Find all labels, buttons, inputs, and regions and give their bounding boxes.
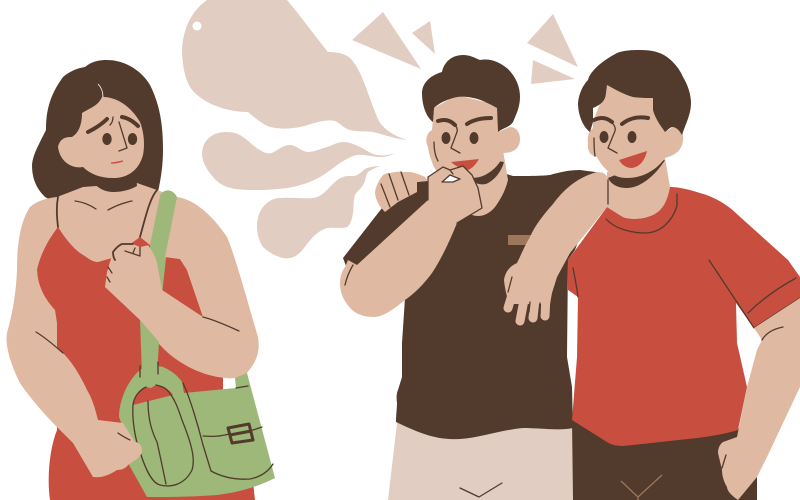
nose and cheek lines [434,122,460,161]
bag body and loop [119,366,275,497]
upper bag strap [150,190,177,295]
woman hair [32,60,163,205]
head [588,85,683,178]
red dress tip above fist [133,237,149,247]
trouser crease [460,483,502,497]
neck and chest [460,150,508,216]
shirt pocket tag [508,235,532,245]
woman figure [7,60,275,500]
nose and cheek lines [594,121,617,156]
woman eyes [102,133,112,145]
bag buckle [228,424,253,443]
lower bag strap [140,320,159,375]
pale trousers [388,423,573,500]
man in red shirt [375,50,800,500]
smile [619,151,647,168]
eyes [600,131,608,143]
sleeve seam and hem [573,260,800,328]
arm outline [345,166,482,285]
red t-shirt [568,187,800,446]
eyebrows [594,117,648,124]
whistling arm [340,166,482,317]
finger lines [508,180,608,314]
neck shadow [608,160,665,188]
fist lines [113,244,133,260]
woman raised arm and fist [105,197,259,378]
gossip speech clouds [182,0,578,258]
dress straps [57,190,157,237]
trouser seam [621,475,662,500]
dress [37,227,255,500]
mouth [451,159,479,170]
knuckle lines [381,172,409,207]
head [426,95,520,178]
dark trousers [572,420,757,500]
woman arm lines [36,317,239,440]
eyes [442,132,450,144]
man in dark shirt [340,55,603,500]
whistling fingers [442,175,460,182]
cloud highlight dot [192,22,202,30]
red dress seen through loop [133,385,173,405]
woman face [58,96,144,178]
hair [578,50,691,135]
hand on shoulder [375,172,428,212]
neck shadow [470,160,504,184]
collar stitch [606,194,677,233]
woman mouth [111,161,123,163]
woman nose and crease [110,117,127,151]
middle speech cloud [202,132,395,190]
woman collarbones [75,201,132,210]
right arm lines [722,327,783,468]
right arm [718,298,800,500]
triangle accents [352,12,421,69]
dark t-shirt [343,170,603,439]
bag stitching [133,362,273,486]
fingers of draped hand [508,295,546,321]
woman neck shadow [83,165,137,192]
arm over friend's shoulder [504,172,609,304]
lower speech cloud [257,166,380,258]
large speech cloud [182,0,407,140]
woman hair strand [98,84,103,97]
neck [607,158,670,219]
handbag [119,362,275,497]
eyebrows [438,118,491,125]
woman lower arm and hand [7,240,142,477]
woman eyebrows [88,119,107,132]
woman torso skin [17,183,240,350]
hair [422,55,520,132]
